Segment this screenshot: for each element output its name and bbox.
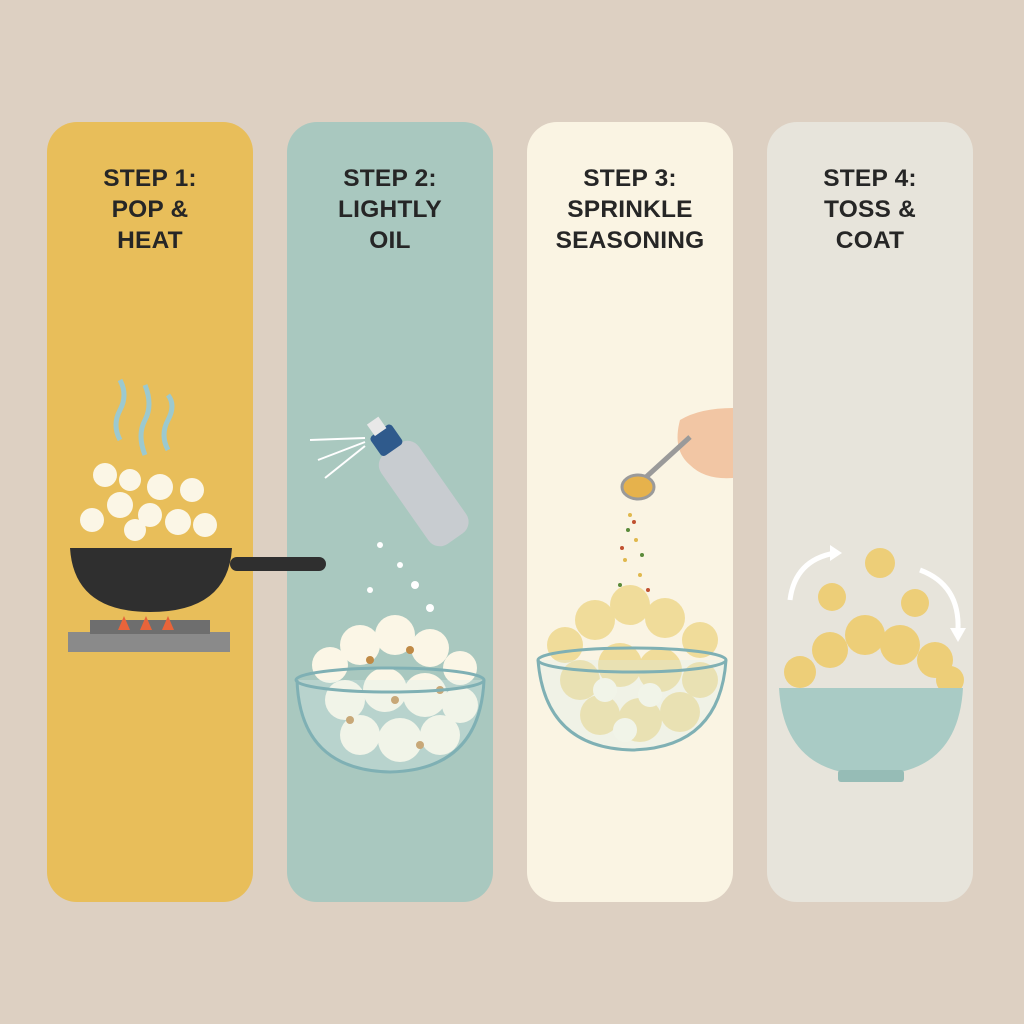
- heading: step 2: LIGHTLY: [338, 196, 442, 223]
- heading: step 1: HEAT: [117, 227, 183, 254]
- heading: step 2: OIL: [369, 227, 411, 254]
- icon: bowl of popcorn: [296, 615, 484, 772]
- heading: step 4: STEP 4:: [823, 165, 917, 192]
- heading: step 4: TOSS &: [824, 196, 916, 223]
- heading: step 4: [823, 165, 917, 254]
- panel: step 3: [527, 122, 733, 902]
- panel: step 1: [47, 122, 253, 902]
- heading: step 3: [556, 165, 704, 254]
- heading: step 2: [338, 165, 442, 254]
- heading: step 1: [103, 165, 197, 254]
- panel: step 4: [767, 122, 973, 902]
- heading: step 1: STEP 1:: [103, 165, 197, 192]
- heading: step 3: STEP 3:: [583, 165, 677, 192]
- icon: toss bowl with arrows: [779, 545, 966, 782]
- icon: spray bottle: [310, 407, 474, 612]
- heading: step 4: COAT: [836, 227, 904, 254]
- heading: step 1: POP &: [112, 196, 188, 223]
- heading: step 3: SPRINKLE: [567, 196, 693, 223]
- icon: pan on stove: [68, 380, 326, 652]
- icon: hand with spoon: [618, 408, 733, 592]
- heading: step 2: STEP 2:: [343, 165, 437, 192]
- icon: seasoned popcorn bowl: [538, 585, 726, 750]
- panel: step 2: [287, 122, 493, 902]
- heading: step 3: SEASONING: [556, 227, 704, 254]
